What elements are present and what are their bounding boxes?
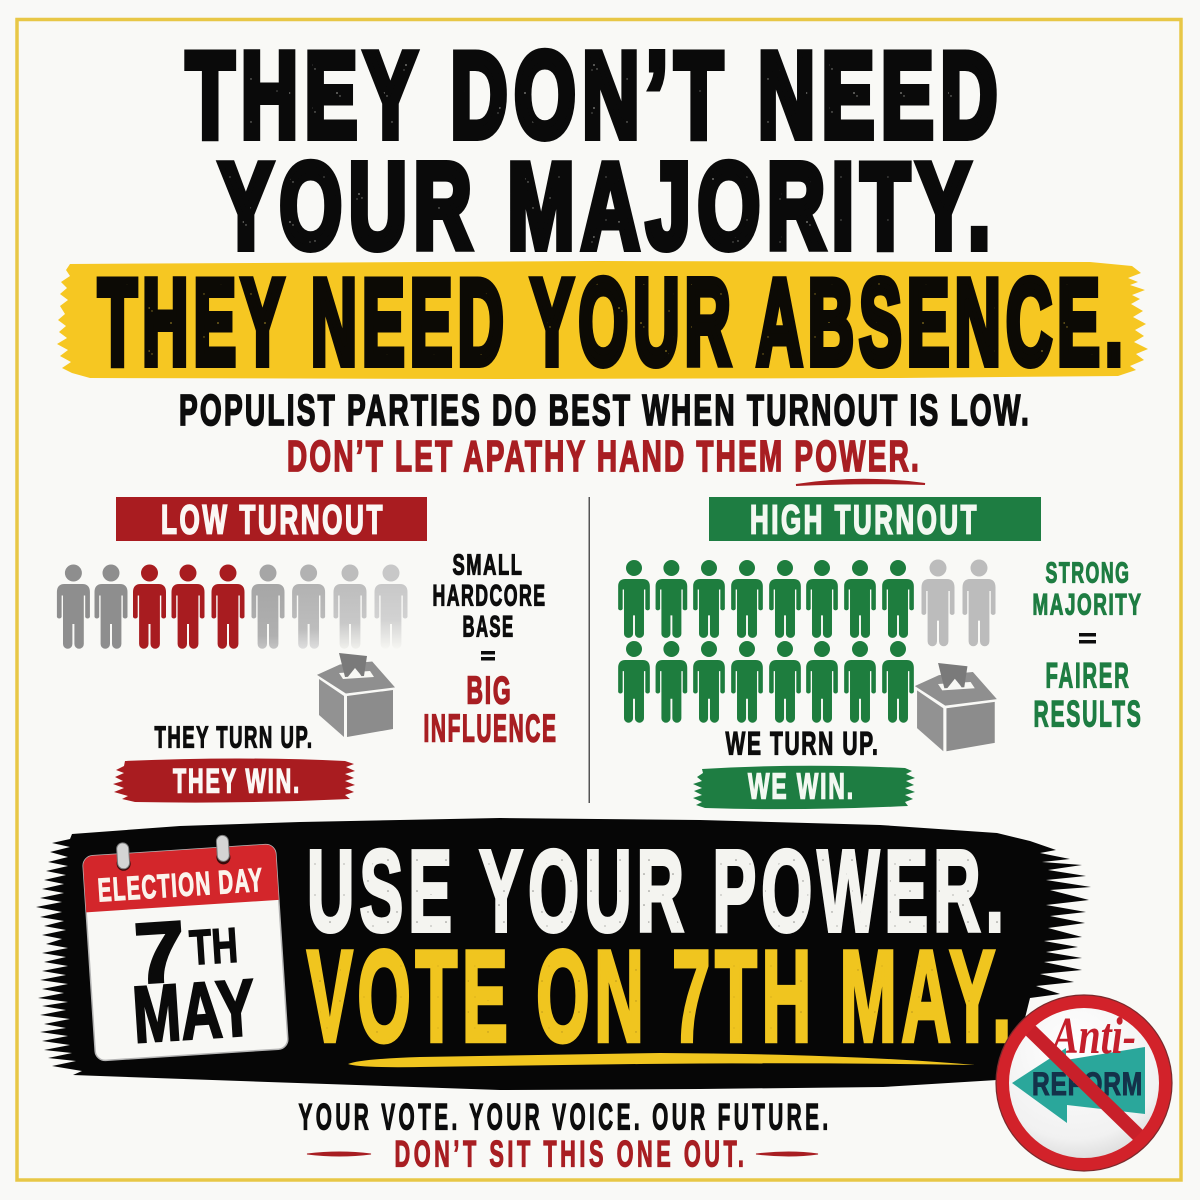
side text: strong majority bbox=[1032, 558, 1142, 734]
panel: low turnout bbox=[57, 496, 558, 803]
red brush: they win: THEY WIN. bbox=[173, 762, 301, 800]
badge disc bbox=[996, 995, 1172, 1171]
calendar header bbox=[83, 844, 279, 912]
side text: small hardcore base: BASE bbox=[462, 610, 514, 644]
we turn up text: WE TURN UP. bbox=[726, 726, 880, 762]
high turnout heading: HIGH TURNOUT bbox=[750, 496, 979, 542]
they turn up text: THEY TURN UP. bbox=[154, 720, 314, 754]
pictogram: low turnout people bbox=[57, 564, 408, 649]
footer text: DON’T SIT THIS ONE OUT. bbox=[394, 1134, 748, 1174]
icon: ballot box bbox=[916, 663, 996, 751]
side text: strong majority: STRONG bbox=[1046, 558, 1130, 590]
date 7: 7 bbox=[132, 904, 188, 1002]
red brush: they win bbox=[113, 758, 355, 803]
footer text bbox=[298, 1096, 832, 1174]
title bbox=[186, 27, 1004, 274]
side text: small hardcore base: BIG bbox=[466, 670, 512, 712]
date MAY: MAY bbox=[130, 963, 258, 1059]
black brush stroke bbox=[36, 818, 1091, 1090]
calendar label: ELECTION DAY bbox=[97, 861, 265, 908]
side text: small hardcore base: HARDCORE bbox=[432, 580, 546, 612]
calendar rings bbox=[116, 835, 230, 869]
low turnout heading: LOW TURNOUT bbox=[161, 496, 385, 542]
calendar page bbox=[83, 844, 288, 1061]
side text: small hardcore base: INFLUENCE bbox=[424, 708, 558, 750]
panel: black brush call to action bbox=[36, 818, 1091, 1090]
red subheading with underline bbox=[287, 432, 925, 485]
low turnout heading bbox=[116, 496, 427, 542]
side text: small hardcore base bbox=[424, 550, 558, 750]
reform label: REFORM bbox=[1032, 1066, 1143, 1102]
badge: anti-reform bbox=[996, 995, 1172, 1171]
icon: ballot box bbox=[318, 653, 394, 737]
icon: election day calendar bbox=[82, 832, 288, 1062]
side text: small hardcore base: SMALL bbox=[452, 550, 524, 582]
date TH: TH bbox=[188, 919, 239, 976]
pictogram: high turnout people bbox=[618, 560, 996, 723]
prohibition ring and slash bbox=[996, 995, 1172, 1171]
side text: strong majority: FAIRER bbox=[1046, 656, 1130, 696]
teal arrow bbox=[1012, 1047, 1145, 1123]
green brush: we win: WE WIN. bbox=[748, 766, 855, 806]
yellow underline bbox=[348, 1053, 975, 1067]
anti label: Anti- bbox=[1050, 1008, 1136, 1065]
divider bbox=[588, 497, 590, 803]
panel: high turnout bbox=[618, 496, 1142, 809]
